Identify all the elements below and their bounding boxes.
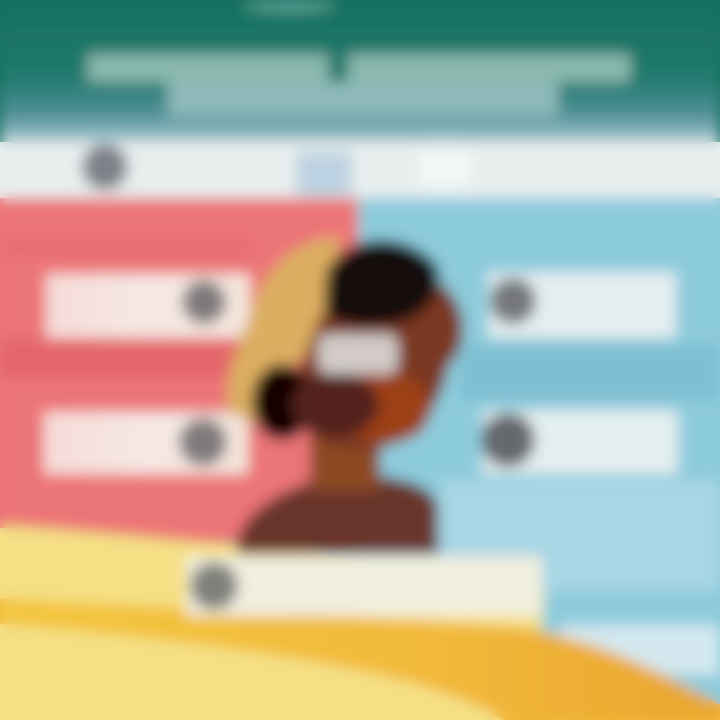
decorative orange swoosh — [0, 598, 720, 720]
icon: right lower badge — [481, 413, 535, 467]
icon: left lower badge — [179, 418, 227, 466]
icon: banner badge — [82, 144, 128, 190]
callout: left upper card — [46, 274, 250, 338]
central label — [318, 334, 398, 374]
panel: top banner — [0, 142, 720, 198]
callout: right upper card — [488, 272, 676, 338]
icon: left upper badge — [182, 280, 226, 324]
panel: header background — [0, 0, 720, 142]
face — [288, 284, 463, 450]
callout: bottom card — [186, 556, 542, 616]
dark shadow — [252, 364, 312, 440]
illustration: central portrait — [227, 236, 463, 554]
icon: bottom badge — [190, 562, 238, 610]
neck — [310, 430, 380, 490]
panel: left red panel — [0, 198, 358, 543]
panel: bottom yellow panel — [0, 525, 720, 720]
blonde hair side — [227, 236, 340, 425]
callout: left lower card — [44, 412, 248, 474]
shoulders — [236, 475, 438, 554]
icon: right upper badge — [490, 278, 536, 324]
heading: title block — [88, 54, 630, 116]
panel: right blue panel — [358, 198, 720, 698]
dark hair — [324, 240, 440, 326]
callout: right lower card — [481, 410, 678, 474]
